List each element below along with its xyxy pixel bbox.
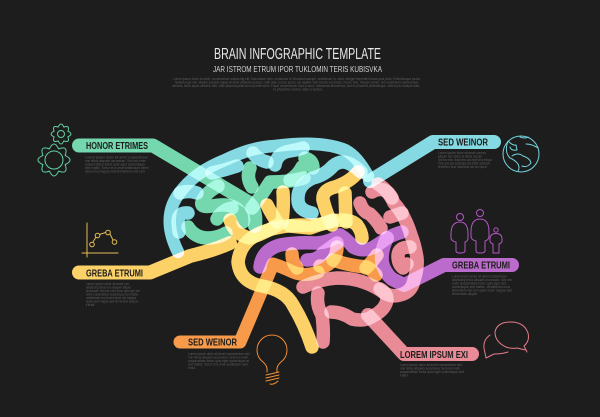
text: sed weinor top right body: Sed nec enim. Nulla tortor quis eget tortor tempus — [438, 158, 492, 162]
label: lorem ipsum exi — [400, 349, 468, 378]
icon: line chart — [82, 223, 118, 257]
label: sed weinor bottom — [188, 336, 250, 370]
text: sed weinor top right body — [438, 151, 492, 169]
label: greba etrumi left — [86, 268, 143, 307]
label: greba etrumi right — [452, 260, 512, 296]
text: greba etrumi right body: Lorem ipsum dolor sit amet consectetuer — [452, 274, 508, 278]
brain: blue lobe — [170, 144, 368, 252]
text: greba etrumi right body — [452, 274, 512, 296]
intro text block: Nullam eget nisi. Mauris suscipit, ligula sit amet pharetra semper, nibh ante cursus purus, vel sagittis velit mauris vel metus. Fusce felis. Integer rutrum, orci vestibulum ullamcorper, — [175, 80, 419, 84]
label: sed weinor top right — [438, 136, 492, 169]
brain: orange lobe with connector — [180, 264, 318, 342]
text: greba etrumi left body: nisl. — [86, 303, 96, 307]
text: honor etrimes body — [85, 156, 149, 174]
text: lorem ipsum exi body: non tellus aliquam accumsan. Sed nec enim — [400, 366, 460, 370]
label: sed weinor bottom: SED WEINOR — [188, 336, 237, 348]
text: greba etrumi left body — [86, 282, 140, 307]
text: sed weinor bottom body: nisl. — [188, 366, 196, 370]
icon: speech bubbles — [484, 322, 528, 358]
text: lorem ipsum exi body: nisl. — [400, 374, 409, 378]
intro text block: ultricies, lacus quam ultricies odio, vitae placerat pede sem sit amet enim. Fusce consectetuer risus a nunc. Maecenas fermentum, sem in pharetra pellentesque, velit turpis volutpat ante, — [172, 84, 420, 88]
text: sed weinor bottom body: Lorem ipsum dolor sit amet consectetuer sed — [188, 352, 250, 356]
subtitle: JAR ISTROM ETRUM IPOR TUKLOMIN TERIS KUBISVKA — [213, 64, 382, 74]
text: sed weinor top right body: Tortor quis eget scelerisque sed mattis vestibulum — [438, 162, 490, 166]
icon: family of people — [451, 210, 502, 253]
title: BRAIN INFOGRAPHIC TEMPLATE — [214, 46, 381, 63]
text: lorem ipsum exi body: suspendisse tortor quis eget scelerisque sed — [400, 370, 464, 374]
text: sed weinor bottom body — [188, 352, 250, 370]
text: honor etrimes body: Lorem ipsum dolor sit amet consectetuer — [85, 156, 149, 160]
text: sed weinor top right body: fermentum urna. Maecenas nisl sem ipsum — [438, 165, 487, 169]
brain and connector lines — [79, 142, 512, 354]
text: honor etrimes body: sed mattis. Tortor et a urna vestibulum lorem — [85, 166, 149, 170]
label: greba etrumi right: GREBA ETRUMI — [452, 260, 510, 272]
text: greba etrumi left body: tortor suspendisse scelerisque sed mattis — [86, 292, 138, 296]
text: greba etrumi left body: adipiscing tellus non aliquam aliquet — [86, 286, 131, 290]
brain: purple lobe with connector — [260, 232, 402, 267]
intro text block — [172, 77, 421, 92]
brain: yellow lobe with connector — [79, 243, 230, 272]
text: lorem ipsum exi body: Lorem ipsum dolor sit amet consectetuer sed — [400, 363, 462, 367]
text: sed weinor bottom body: sed mattis. Tortor et a urna vestibulum nam — [188, 362, 248, 366]
brain: green lobe with connector — [79, 146, 255, 226]
intro text block: in pharetra metus odio a lectus. — [273, 88, 323, 92]
text: sed weinor top right body: Lorem ipsum dolor sit amet consec — [438, 151, 486, 155]
text: greba etrumi right body: adipiscing tellus aliquam accumsan. Sed nec — [452, 278, 512, 282]
text: greba etrumi left body: Lorem ipsum dolor sit amet con — [86, 282, 129, 286]
icon: gears — [38, 124, 71, 176]
text: greba etrumi right body: scelerisque sed mattis. Vestibulum urna — [452, 285, 510, 289]
label: greba etrumi left: GREBA ETRUMI — [86, 268, 143, 280]
text: greba etrumi left body: quam sem magna nam fermentum tempus — [86, 300, 138, 304]
icon: light bulb — [257, 335, 287, 384]
text: greba etrumi right body: fermentum nisl sem quam lorem magna nam — [452, 288, 512, 292]
text: sed weinor top right body: aliquet non tellus et tellus accum — [438, 154, 482, 158]
text: greba etrumi right body: fermentum aliquet. — [452, 292, 478, 296]
label: honor etrimes — [85, 140, 149, 174]
text: honor etrimes body: non tellus aliquam accumsan. Sed nec enim — [85, 159, 146, 163]
text: sed weinor bottom body: suspendisse tortor quis eget scelerisque at — [188, 359, 249, 363]
text: honor etrimes body: Quis urna magna nam fermentum nisl sem — [85, 170, 145, 174]
text: lorem ipsum exi body — [400, 363, 464, 378]
text: sed weinor bottom body: non tellus aliquam accumsan. Sed nec enim — [188, 356, 248, 360]
text: greba etrumi left body: accumsan. Sed nec enim tortor quis eget sed — [86, 289, 140, 293]
connector: blue label bar — [370, 142, 494, 181]
brain: salmon lobe with connector — [303, 184, 417, 296]
label: lorem ipsum exi: LOREM IPSUM EXI — [400, 349, 468, 361]
icon: globe — [503, 136, 539, 172]
label: sed weinor top right: SED WEINOR — [438, 136, 488, 148]
intro text block: Lorem ipsum dolor sit amet, consectetuer adipiscing elit. Duis autem sem, commodo id, tincidunt suscipit, vestibulum in, dolor. Integer imperdiet lectus quis justo. Pellentesque ipsum. — [173, 77, 421, 81]
text: greba etrumi right body: enim suspendisse tortor quis eget sed — [452, 282, 506, 286]
label: honor etrimes: HONOR ETRIMES — [86, 140, 148, 152]
text: honor etrimes body: suspendisse tortor quis eget scelerisque — [85, 162, 145, 166]
text: greba etrumi left body: vestibulum urna fermentum nisl magna — [86, 296, 136, 300]
